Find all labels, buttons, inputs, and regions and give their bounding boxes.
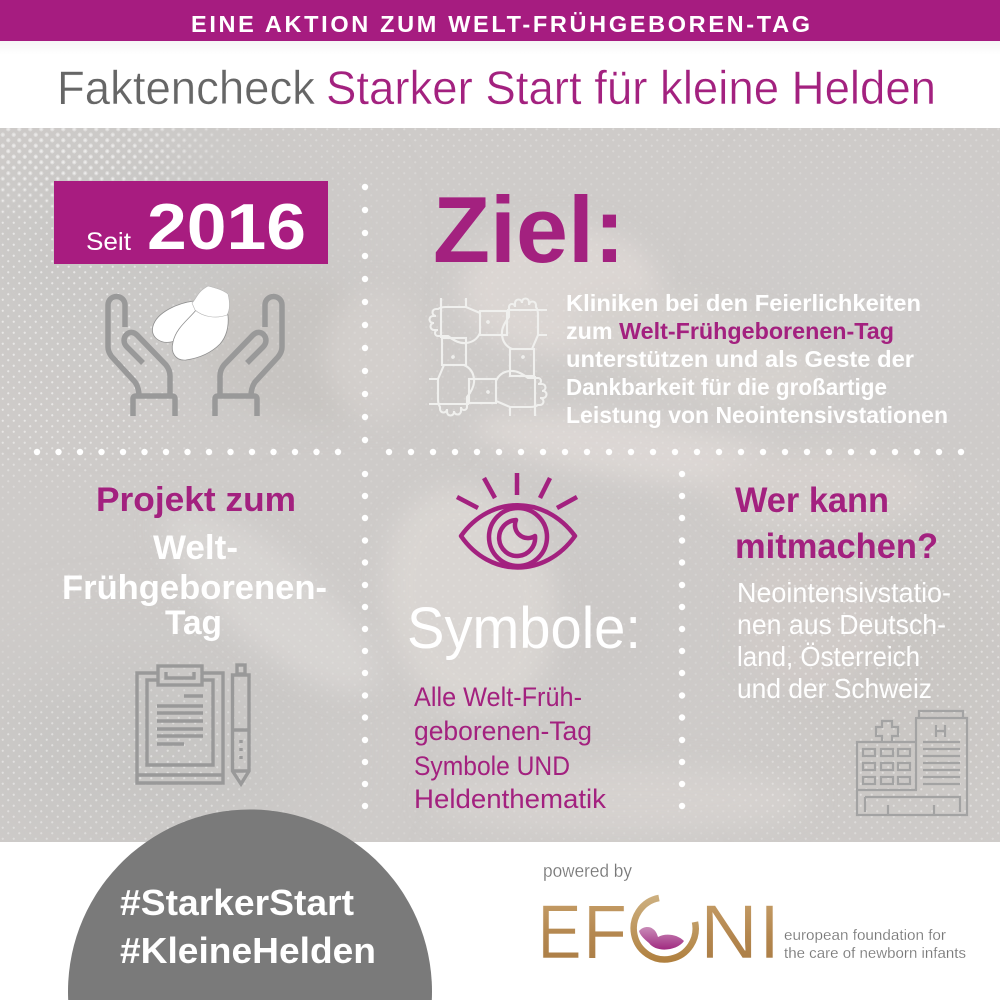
background photo with dot screen [0,128,1000,842]
dotted dividers [34,184,964,809]
heading: wer kann mitmachen [735,481,938,566]
hashtag circle: #StarkerStart [120,882,354,923]
heading: ziel: Ziel: [433,177,625,282]
text: ziel description: Dankbarkeit für die großartige [566,374,887,400]
logo: efcni [538,890,966,975]
text: ziel description: unterstützen und als Geste der [566,346,914,372]
panel: symbole [407,473,641,814]
text: wer kann mitmachen description: Neointensivstatio- [737,577,951,608]
top banner: EINE AKTION ZUM WELT-FRÜHGEBOREN-TAG [191,11,810,37]
icon: hospital [857,711,967,815]
icon: four linked arms [429,298,547,416]
title: Faktencheck [57,61,315,114]
text: ziel description: Leistung von Neointensivstationen [566,402,948,428]
heading: wer kann mitmachen: Wer kann [735,481,889,520]
icon: hands holding baby socks [108,286,282,416]
text: ziel description: zum Welt-Frühgeborenen-Tag [566,318,894,344]
panel: projekt [62,481,327,784]
logo: efcni: F [583,890,627,975]
text: ziel description: Kliniken bei den Feierlichkeiten [566,290,921,316]
heading: symbole: Symbole: [407,596,641,661]
text: wer kann mitmachen description: nen aus Deutsch- [737,609,946,640]
logo: efcni: I [759,890,780,975]
text: symbole description: Alle Welt-Früh- [414,682,582,712]
title: Starker Start für kleine Helden [326,61,936,114]
badge: seit 2016: 2016 [147,190,306,263]
text: welt-frühgeborenen-tag: Tag [165,604,222,642]
logo: efcni: E [538,890,582,975]
text: wer kann mitmachen description: und der Schweiz [737,673,932,704]
footer background [0,842,1000,1000]
top banner [0,0,1000,41]
heading: projekt zum: Projekt zum [96,481,296,519]
text: welt-frühgeborenen-tag: Frühgeborenen- [62,569,327,607]
logo: efcni: N [700,890,758,975]
text: wer kann mitmachen description: land, Österreich [737,641,920,672]
badge: seit 2016: Seit [86,228,131,256]
hashtag circle: #KleineHelden [120,930,376,971]
text: symbole description: geborenen-Tag [414,716,592,746]
text: wer kann mitmachen description [737,577,951,704]
logo: efcni: european foundation for [784,927,946,944]
text: ziel description [566,290,948,428]
icon: eye with rays [457,473,577,568]
powered by label: powered by [543,860,633,881]
panel: ziel [429,177,948,428]
text: symbole description [414,682,607,814]
badge: seit 2016 [54,181,328,264]
logo: efcni: the care of newborn infants [784,945,966,962]
text: symbole description: Heldenthematik [414,784,607,814]
text: symbole description: Symbole UND [414,751,570,781]
panel: wer kann mitmachen [735,481,967,815]
title [0,41,1000,114]
heading: wer kann mitmachen: mitmachen? [735,527,938,566]
hashtag circle [68,809,432,1000]
panel: seit 2016 [54,181,328,416]
icon: clipboard and pen [137,665,249,784]
text: welt-frühgeborenen-tag [62,529,327,642]
text: welt-frühgeborenen-tag: Welt- [153,529,238,567]
